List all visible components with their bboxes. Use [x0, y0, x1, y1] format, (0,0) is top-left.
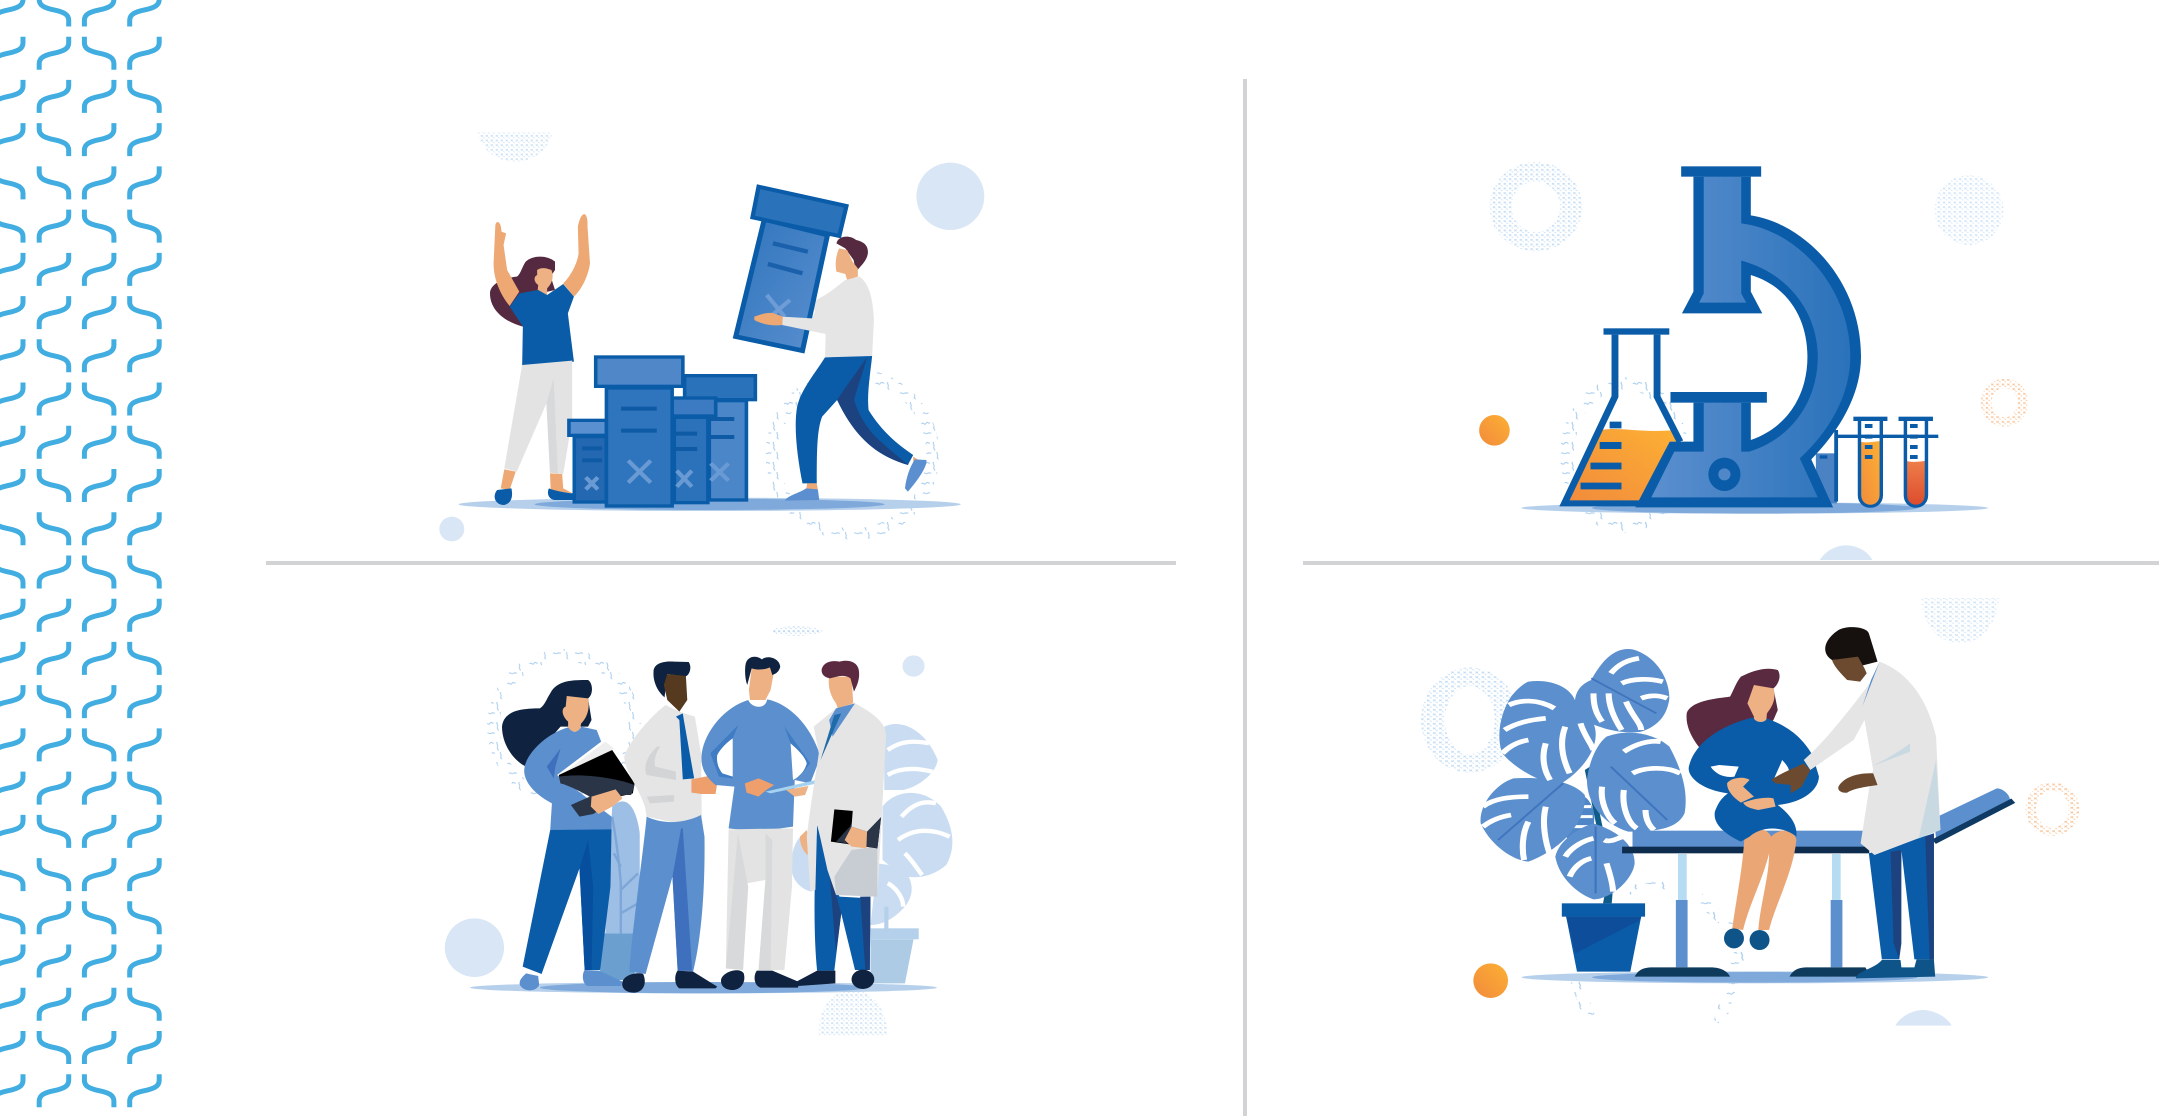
speckle disc	[819, 990, 887, 1036]
large pale circle	[445, 918, 504, 977]
ground shadow	[459, 498, 961, 511]
decorative wave pattern strip	[0, 0, 159, 1107]
small pale circle	[903, 655, 925, 677]
ground shadow	[1521, 502, 1988, 514]
man carrying bottle	[785, 237, 926, 501]
speckle arc	[771, 626, 822, 636]
ground shadow	[470, 982, 937, 993]
panel: patient and doctor	[1433, 598, 2074, 1026]
orange speckled ring	[1986, 383, 2023, 422]
large pale circle	[916, 163, 984, 230]
speckled disc	[1934, 175, 2003, 245]
pale semicircle	[1895, 1010, 1952, 1026]
microscope	[1635, 166, 1861, 507]
orange dot	[1479, 415, 1510, 446]
woman raising arms	[490, 214, 590, 505]
background plant left	[600, 801, 640, 980]
background plant right	[791, 724, 952, 983]
ground shadow	[1521, 971, 1988, 983]
squiggle ring	[772, 374, 933, 534]
man's front arm and hand	[754, 297, 856, 334]
pot	[1562, 903, 1645, 972]
test tube red	[1899, 417, 1933, 506]
leaf D	[1481, 778, 1585, 862]
squiggle ring	[493, 655, 635, 798]
pale semicircle	[1820, 545, 1872, 560]
leaf A	[1575, 649, 1669, 732]
man with tie	[622, 661, 717, 993]
small pale circle	[439, 517, 464, 541]
stacked medicine bottles	[569, 357, 755, 506]
woman with folder	[502, 680, 635, 990]
panel: microscope and lab glassware	[1479, 166, 2023, 560]
examination bed	[1622, 788, 2013, 977]
test tube orange	[1853, 417, 1887, 506]
leaf E	[1555, 823, 1635, 899]
leaf B	[1499, 681, 1596, 785]
panel: medicine bottles	[439, 132, 984, 541]
speckle semicircle	[477, 132, 552, 162]
beaker and tube rack	[1816, 430, 1938, 503]
doctor examining patient	[1771, 627, 1940, 978]
orange speckled ring	[2031, 786, 2074, 832]
man in blue sweater	[701, 657, 821, 990]
leaf center	[1560, 794, 1594, 842]
speckled ring	[1433, 677, 1507, 763]
orange dot	[1473, 963, 1508, 998]
squiggles	[1576, 885, 1741, 1023]
carried bottle	[736, 187, 846, 351]
seated patient	[1687, 669, 1819, 950]
doctor with tablet	[796, 661, 886, 989]
speckled disc top	[1921, 598, 1999, 643]
leaf C	[1587, 733, 1686, 832]
flask	[1564, 328, 1680, 503]
potted monstera	[1481, 649, 1686, 972]
squiggle ring	[1567, 383, 1682, 527]
speckled ring	[1501, 172, 1571, 242]
panel: medical team	[445, 626, 952, 1036]
